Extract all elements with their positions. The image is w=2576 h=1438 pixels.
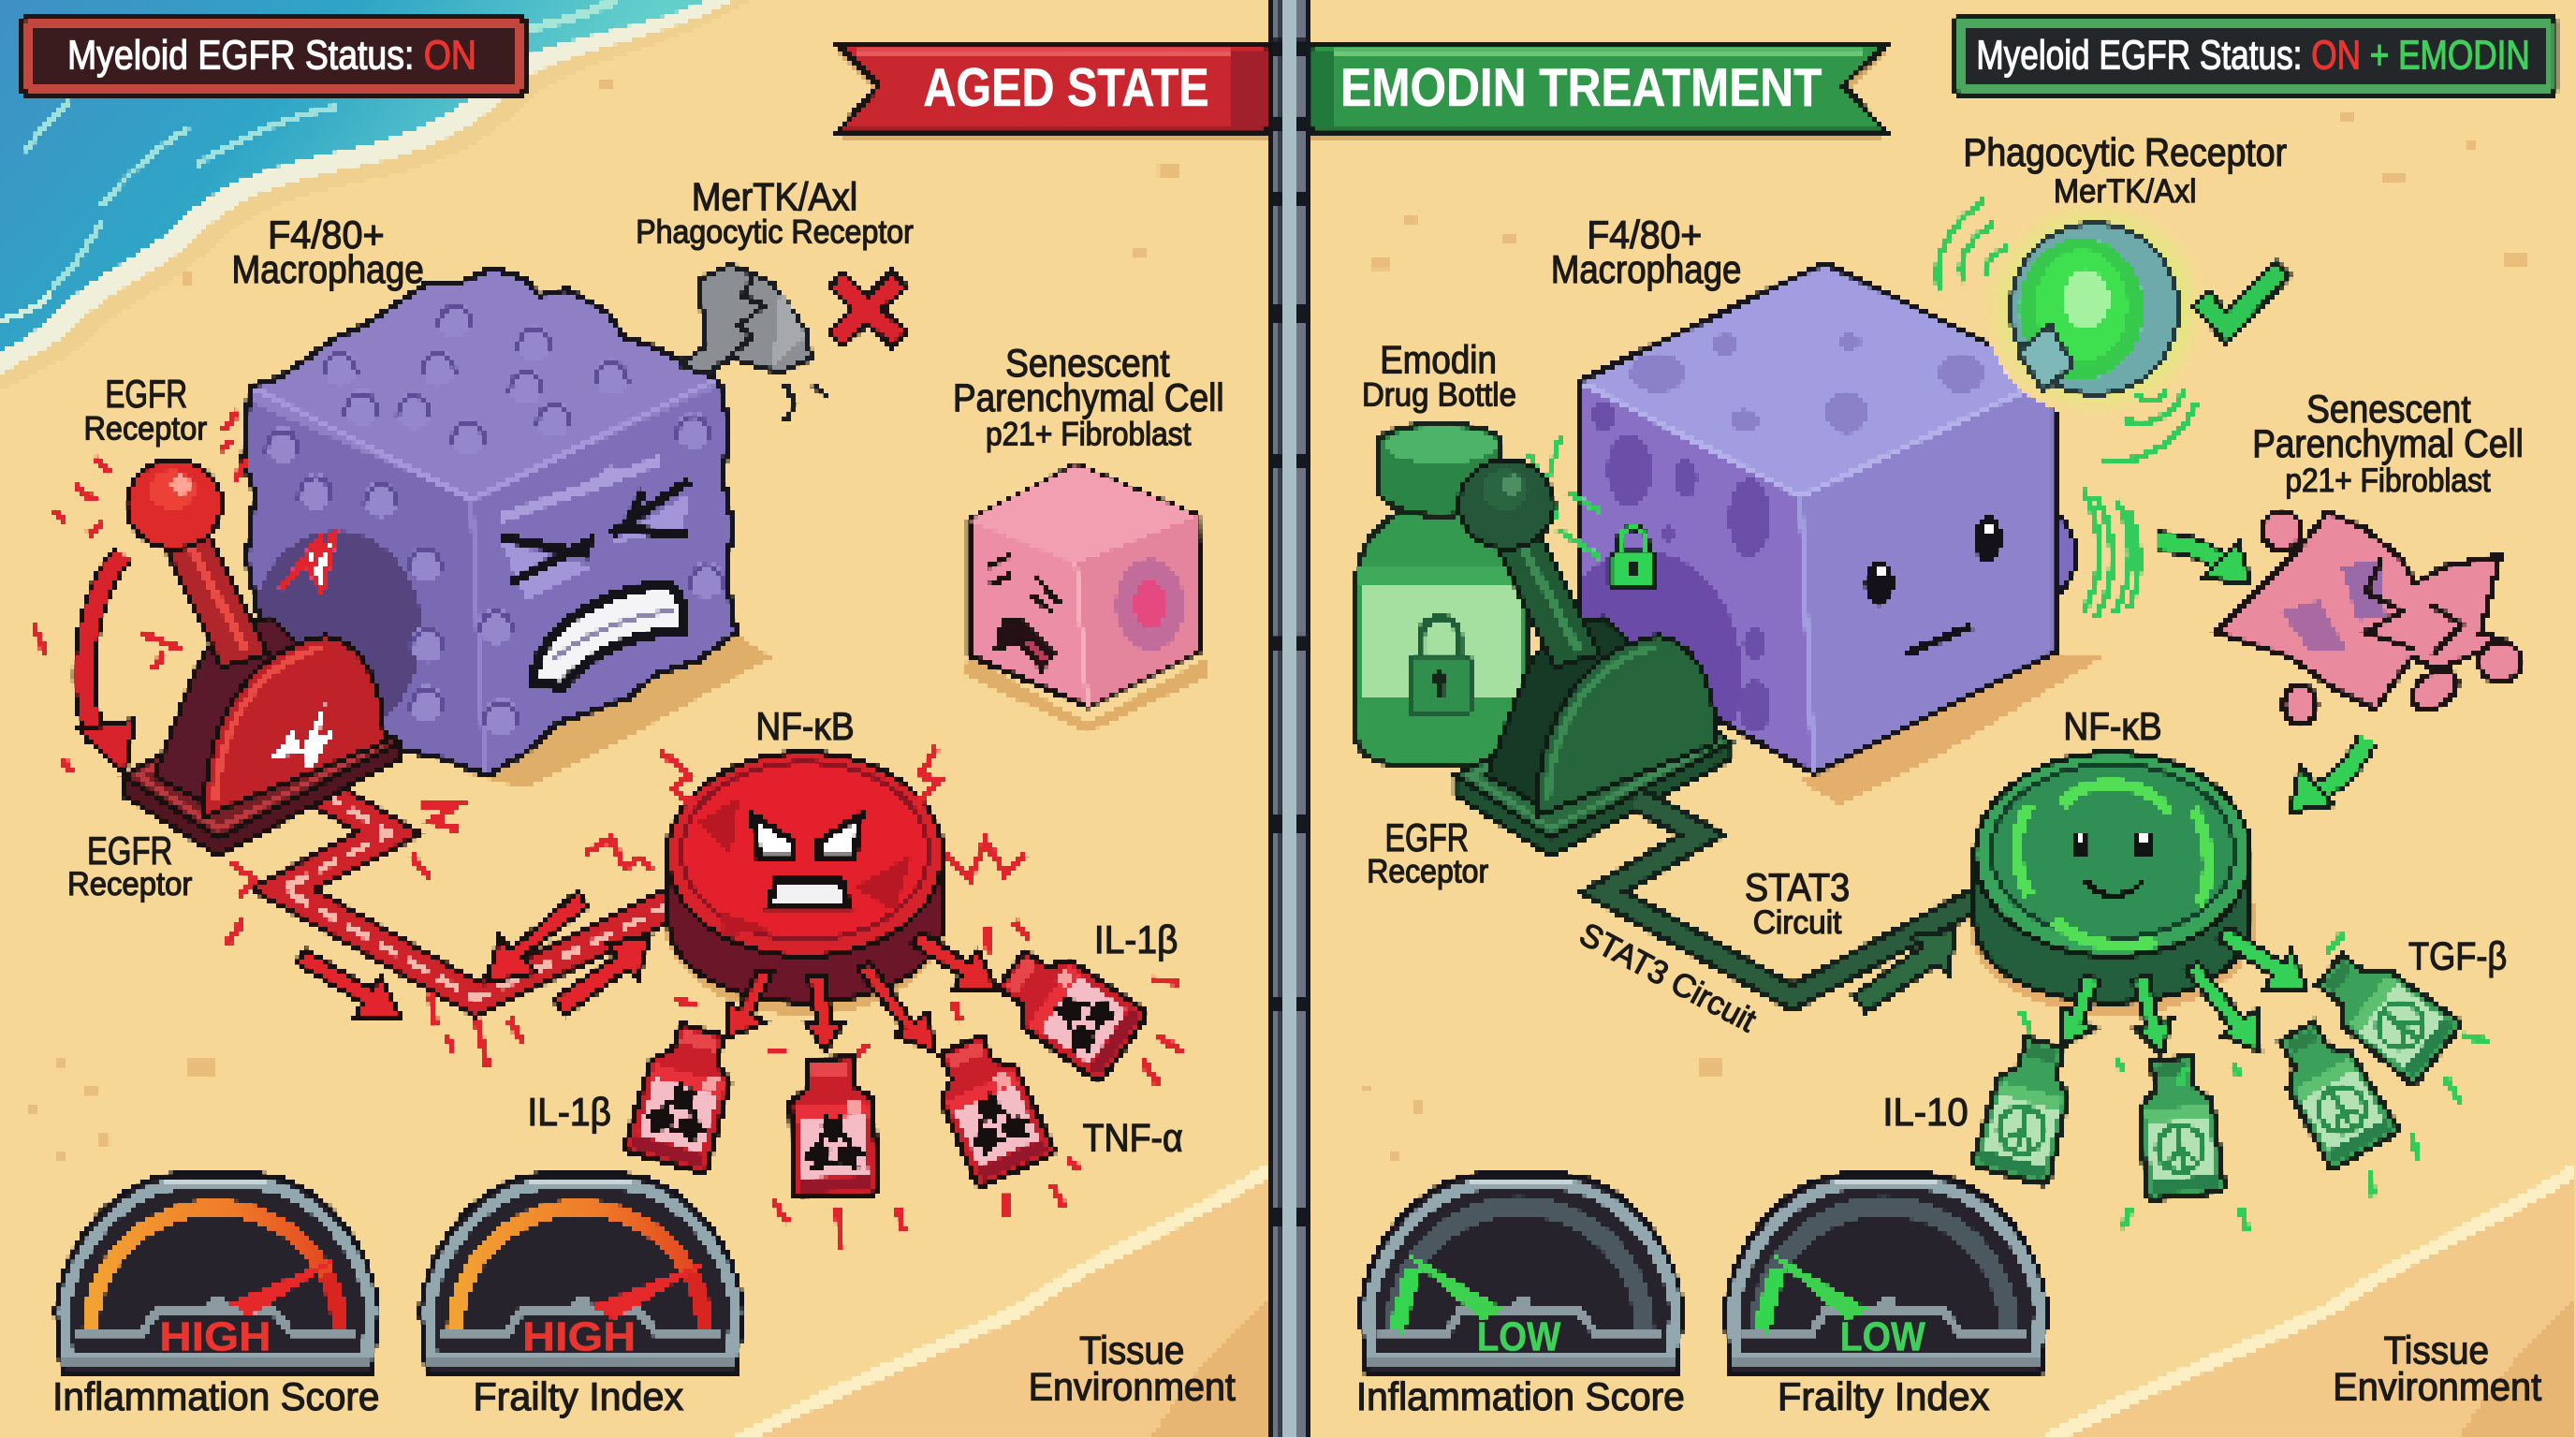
gauge readout: low: LOW: [1477, 1314, 1561, 1360]
gauge readout: high: HIGH: [522, 1314, 636, 1360]
labels: aged macrophage: F4/80+: [268, 213, 385, 257]
icon: lever motion arrow: [79, 553, 135, 774]
banner: aged state: [838, 44, 1268, 141]
output arrows: red cytokines: [726, 932, 997, 1051]
icon: red X: [829, 271, 907, 346]
labels: aged receptor: [636, 175, 914, 251]
labels: emodin bottle: Drug Bottle: [1362, 377, 1516, 414]
label: tissue environment aged: [1029, 1328, 1236, 1408]
senescent cell: broken pink fragments: [2217, 511, 2522, 725]
labels: treated macrophage: [1551, 213, 1741, 291]
status box: aged: [20, 15, 527, 97]
label: aged NF-kB: NF-κB: [755, 704, 855, 748]
signal waves: receptor and cube: [1503, 200, 2197, 618]
circuit: aged red wire: [283, 792, 681, 999]
EGFR lever: red on state: [124, 460, 399, 856]
labels: aged EGFR top: [84, 372, 207, 447]
gauge: frailty low: [1725, 1175, 2047, 1373]
gauge: frailty high: [420, 1175, 742, 1373]
status text: emodin: Myeloid EGFR Status: ON + EMODIN: [1976, 33, 2530, 79]
heading: emodin treatment: EMODIN TREATMENT: [1340, 58, 1822, 118]
labels: aged macrophage: Macrophage: [231, 247, 424, 291]
labels: aged senescent cell: [953, 341, 1224, 453]
labels: treated senescent cell: Parenchymal Cell: [2252, 421, 2524, 465]
labels: STAT3 circuit: Circuit: [1753, 904, 1842, 941]
labels: STAT3 circuit: [1745, 865, 1850, 941]
green arrow: cell to NF-kB: [2291, 740, 2367, 812]
labels: emodin bottle: [1362, 337, 1516, 414]
label: tissue environment aged: Environment: [1029, 1364, 1236, 1408]
labels: aged senescent cell: p21+ Fibroblast: [986, 417, 1192, 453]
bottle: IL-10: [1971, 1033, 2084, 1186]
banner: emodin treatment: [1311, 44, 1886, 141]
NF-kB: angry red disc: [664, 753, 946, 1016]
heading: aged state: AGED STATE: [923, 58, 1209, 118]
labels: treated receptor: [1963, 130, 2287, 210]
sparkles: green: [2021, 933, 2489, 1232]
gritted teeth: [534, 585, 684, 687]
output arrows: green cytokines: [2060, 927, 2306, 1055]
gauge label: Frailty Index: [473, 1374, 683, 1418]
label: IL-1b right: IL-1β: [1094, 917, 1178, 961]
labels: aged EGFR bottom: Receptor: [67, 866, 193, 902]
gauge: inflammation high: [56, 1175, 378, 1373]
icon: small green padlock: [1610, 527, 1656, 588]
labels: treated senescent cell: Senescent: [2306, 387, 2471, 431]
labels: treated EGFR: EGFR: [1385, 815, 1469, 859]
labels: aged receptor: Phagocytic Receptor: [636, 214, 914, 251]
sparks and lightning: aged: [33, 411, 1183, 1249]
signal arrows: aged circuit: [296, 890, 651, 1019]
macrophage: treated, smooth cube: [1544, 246, 2103, 805]
bottle: third green: [2262, 1011, 2400, 1170]
neutral mouth: [1906, 626, 1971, 654]
gauge label: Inflammation Score: [1356, 1374, 1685, 1418]
gauge: inflammation low: [1360, 1175, 1682, 1373]
label: TGF-b: TGF-β: [2408, 934, 2507, 978]
gauge label: Inflammation Score: [52, 1374, 379, 1418]
labels: aged EGFR bottom: [67, 829, 193, 902]
bottle: TNF-a: [922, 1027, 1056, 1188]
labels: treated EGFR: [1367, 815, 1488, 889]
label: tissue environment treated: [2333, 1328, 2541, 1408]
label: tissue environment treated: Environment: [2333, 1364, 2541, 1408]
icon: green check mark: [2193, 261, 2291, 344]
EGFR lever: dark green blocked: [1456, 460, 1732, 856]
phagocytic receptor: glowing green: [1984, 200, 2208, 418]
labels: treated EGFR: Receptor: [1367, 853, 1488, 889]
status box: emodin: [1952, 15, 2558, 97]
labels: aged macrophage: [231, 213, 424, 291]
STAT3 circuit: dark green wire: [1603, 799, 1978, 997]
angry eyes: [501, 479, 690, 583]
bottle: center green: [2132, 1054, 2225, 1200]
bottle: TGF-b: [2305, 939, 2463, 1086]
labels: aged EGFR bottom: EGFR: [87, 829, 172, 873]
label: IL-1b left: IL-1β: [527, 1090, 611, 1134]
label: STAT3 circuit along wire: STAT3 Circuit: [1573, 916, 1763, 1039]
NF-kB: calm green disc: [1969, 753, 2258, 1016]
labels: treated macrophage: Macrophage: [1551, 247, 1741, 291]
bottle: center: [786, 1056, 879, 1198]
calm eyes: [1973, 516, 2002, 562]
gauge label: Frailty Index: [1778, 1374, 1989, 1418]
background: sand specks: [30, 79, 2528, 1160]
background: dark sand band, aged side: [739, 1170, 1268, 1438]
labels: treated receptor: Phagocytic Receptor: [1963, 130, 2287, 174]
labels: aged EGFR top: Receptor: [84, 410, 207, 447]
emodin drug bottle with padlock: [1354, 424, 1526, 764]
bottle: IL-1b left: [623, 1018, 743, 1174]
bottle: IL-1b right: [987, 934, 1149, 1083]
background: dark sand band, treatment side: [2047, 1170, 2576, 1438]
labels: treated macrophage: F4/80+: [1587, 213, 1702, 257]
labels: treated senescent cell: [2252, 387, 2524, 499]
signal arrow: STAT3 to NF-kB: [1853, 930, 1955, 1012]
gauge readout: high: HIGH: [159, 1314, 271, 1360]
green arrow: receptor to cell: [2156, 542, 2250, 583]
labels: aged receptor: MerTK/Axl: [692, 175, 857, 219]
labels: treated receptor: MerTK/Axl: [2054, 173, 2197, 210]
labels: emodin bottle: Emodin: [1380, 337, 1497, 381]
labels: aged senescent cell: Senescent: [1005, 341, 1170, 385]
label: IL-10: IL-10: [1882, 1090, 1969, 1134]
labels: aged EGFR top: EGFR: [105, 372, 187, 416]
labels: STAT3 circuit: STAT3: [1745, 865, 1850, 909]
senescent cell: pink cube: [961, 465, 1208, 733]
labels: aged senescent cell: Parenchymal Cell: [953, 375, 1224, 419]
background: ocean and shoreline: [0, 0, 753, 391]
label: tissue environment treated: Tissue: [2384, 1328, 2489, 1372]
divider between panels: [1267, 0, 1311, 1438]
status text: aged: Myeloid EGFR Status: ON: [67, 33, 476, 79]
gauge readout: low: LOW: [1840, 1314, 1926, 1360]
label: tissue environment aged: Tissue: [1079, 1328, 1184, 1372]
broken receptor: [681, 265, 829, 420]
labels: treated senescent cell: p21+ Fibroblast: [2285, 462, 2491, 499]
label: TNF-a: TNF-α: [1083, 1115, 1183, 1159]
macrophage: aged, lumpy angry cube: [213, 246, 772, 788]
label: treated NF-kB: NF-κB: [2063, 704, 2162, 748]
